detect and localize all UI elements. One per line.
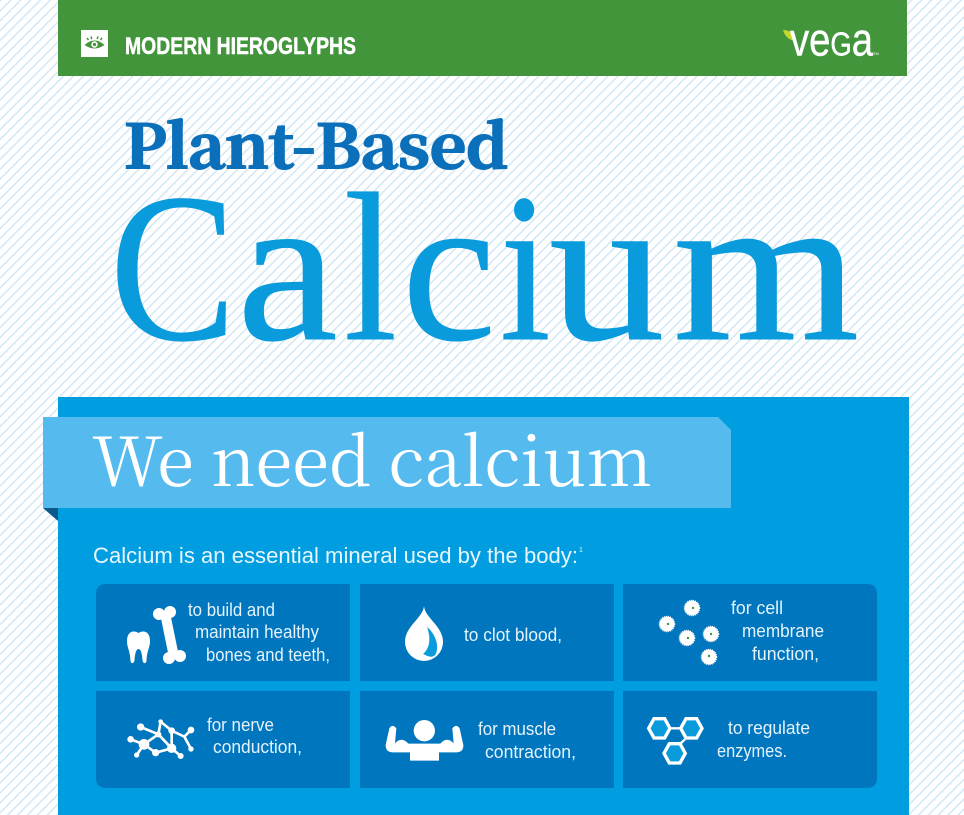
panel: we need calcium bbox=[43, 397, 909, 815]
card text bbox=[478, 719, 576, 762]
icon: cells bbox=[660, 600, 718, 664]
card text bbox=[717, 718, 810, 761]
card text bbox=[731, 598, 824, 664]
card text bbox=[207, 715, 302, 757]
ribbon fold bbox=[43, 508, 58, 521]
vega logo: veGa bbox=[790, 14, 873, 66]
icon: hexagon molecule bbox=[649, 719, 702, 763]
icon: eye logo bbox=[81, 30, 108, 57]
card text: function, bbox=[752, 644, 819, 664]
icon: tooth bbox=[127, 632, 150, 663]
title: Plant-Based: Plant-Based bbox=[124, 100, 508, 186]
icon: nerve network bbox=[129, 721, 193, 758]
card text: to clot blood, bbox=[464, 625, 562, 645]
brand name: MODERN HIEROGLYPHS bbox=[125, 33, 356, 60]
card text: contraction, bbox=[485, 742, 576, 762]
card text: to build and bbox=[188, 600, 275, 620]
card text: for cell bbox=[731, 598, 783, 618]
card: bones and teeth bbox=[96, 584, 350, 681]
title: Calcium: i bbox=[500, 150, 551, 385]
card: clot blood bbox=[360, 584, 614, 681]
icon: bone bbox=[153, 606, 186, 664]
icon: blood drop bbox=[405, 606, 443, 661]
header bar bbox=[58, 0, 907, 76]
icon: flexing figure bbox=[386, 720, 463, 761]
footnote mark: 1 bbox=[579, 547, 583, 554]
card text: membrane bbox=[742, 621, 824, 641]
card text: for muscle bbox=[478, 719, 556, 739]
title: Calcium bbox=[110, 150, 859, 385]
card text: bones and teeth, bbox=[206, 645, 330, 665]
ribbon bbox=[43, 417, 731, 508]
card text: maintain healthy bbox=[195, 622, 319, 642]
title: Calcium: c bbox=[402, 150, 496, 385]
card text: conduction, bbox=[213, 737, 302, 757]
vega logo: TM bbox=[873, 51, 879, 56]
title: Calcium: u bbox=[549, 150, 665, 385]
card text: for nerve bbox=[207, 715, 274, 735]
title: Calcium: l bbox=[344, 150, 397, 385]
card text: to regulate bbox=[728, 718, 810, 738]
section heading: We need calcium bbox=[92, 409, 652, 506]
title: Calcium: a bbox=[237, 150, 338, 385]
card: regulate enzymes bbox=[623, 691, 877, 788]
intro text: Calcium is an essential mineral used by the body: bbox=[93, 543, 578, 568]
card: nerve conduction bbox=[96, 691, 350, 788]
title: Calcium: m bbox=[673, 150, 859, 385]
card: muscle contraction bbox=[360, 691, 614, 788]
title: Calcium: C bbox=[110, 150, 236, 385]
card text: enzymes. bbox=[717, 741, 787, 761]
card text bbox=[188, 600, 330, 665]
card: cell membrane bbox=[623, 584, 877, 681]
